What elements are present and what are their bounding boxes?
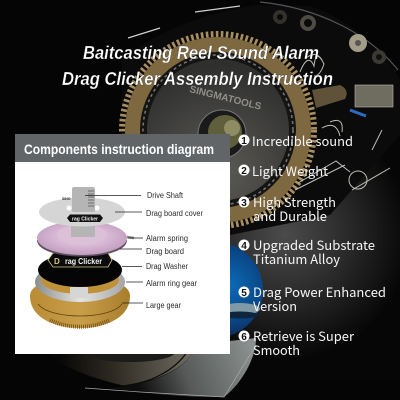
feature list <box>238 131 386 359</box>
title: Baitcasting Reel Sound Alarm <box>83 43 319 63</box>
diagram labels: Drive Shaft <box>147 191 184 200</box>
icon: drag washer: rag Clicker <box>65 257 102 266</box>
panel heading: Components instruction diagram <box>24 141 214 157</box>
diagram labels: Alarm spring <box>146 234 188 243</box>
feature 3: and Durable <box>253 206 327 225</box>
icon: blue spool <box>167 242 263 338</box>
icon: drive shaft and drag board cover: SING <box>62 197 71 201</box>
feature 5: Drag Power Enhanced <box>253 282 386 301</box>
feature 1: 1 <box>241 136 247 147</box>
icon: springs and clips <box>295 54 390 190</box>
diagram labels: Alarm ring gear <box>146 279 197 288</box>
feature 6 <box>238 326 355 359</box>
feature 3: High Strength <box>253 192 336 211</box>
feature 4: 4 <box>241 241 247 252</box>
feature 1: Incredible sound <box>252 131 353 150</box>
icon: brass drive gear: SINGMATOOLS <box>188 84 263 113</box>
diagram labels <box>146 191 203 310</box>
diagram labels: Drag Washer <box>146 262 188 271</box>
feature 3 <box>238 192 336 225</box>
diagram labels: Drag board cover <box>146 209 203 218</box>
feature 4: Titanium Alloy <box>253 249 340 268</box>
icon: drag washer <box>38 253 122 287</box>
feature 6: Retrieve is Super <box>253 326 355 345</box>
icon: silver reel body <box>50 338 256 397</box>
icon: drive shaft and drag board cover <box>39 187 125 237</box>
diagram labels: Large gear <box>146 301 181 310</box>
diagram labels: Drag board <box>146 247 184 256</box>
panel: components instruction diagram <box>15 134 230 354</box>
icon: alarm ring gear <box>35 262 125 302</box>
feature 2: 2 <box>241 166 247 177</box>
feature 5: 5 <box>241 288 247 299</box>
icon: large gear <box>30 276 130 328</box>
icon: drag washer: D <box>54 257 60 266</box>
feature 6: Smooth <box>253 340 300 359</box>
feature 4: Upgraded Substrate <box>253 235 375 254</box>
feature 6: 6 <box>241 332 247 343</box>
icon: brass drive gear <box>122 34 314 226</box>
feature 2: Light Weight <box>252 161 328 180</box>
feature 4 <box>238 235 375 268</box>
feature 3: 3 <box>241 198 247 209</box>
icon: drag board <box>37 221 134 256</box>
feature 5: Version <box>253 296 297 315</box>
icon: drive shaft and drag board cover: rag Clicker <box>72 216 98 222</box>
title: Drag Clicker Assembly Instruction <box>62 69 333 89</box>
title <box>62 43 333 89</box>
panel heading <box>15 134 230 162</box>
leader lines <box>85 196 143 303</box>
feature 5 <box>238 282 386 315</box>
